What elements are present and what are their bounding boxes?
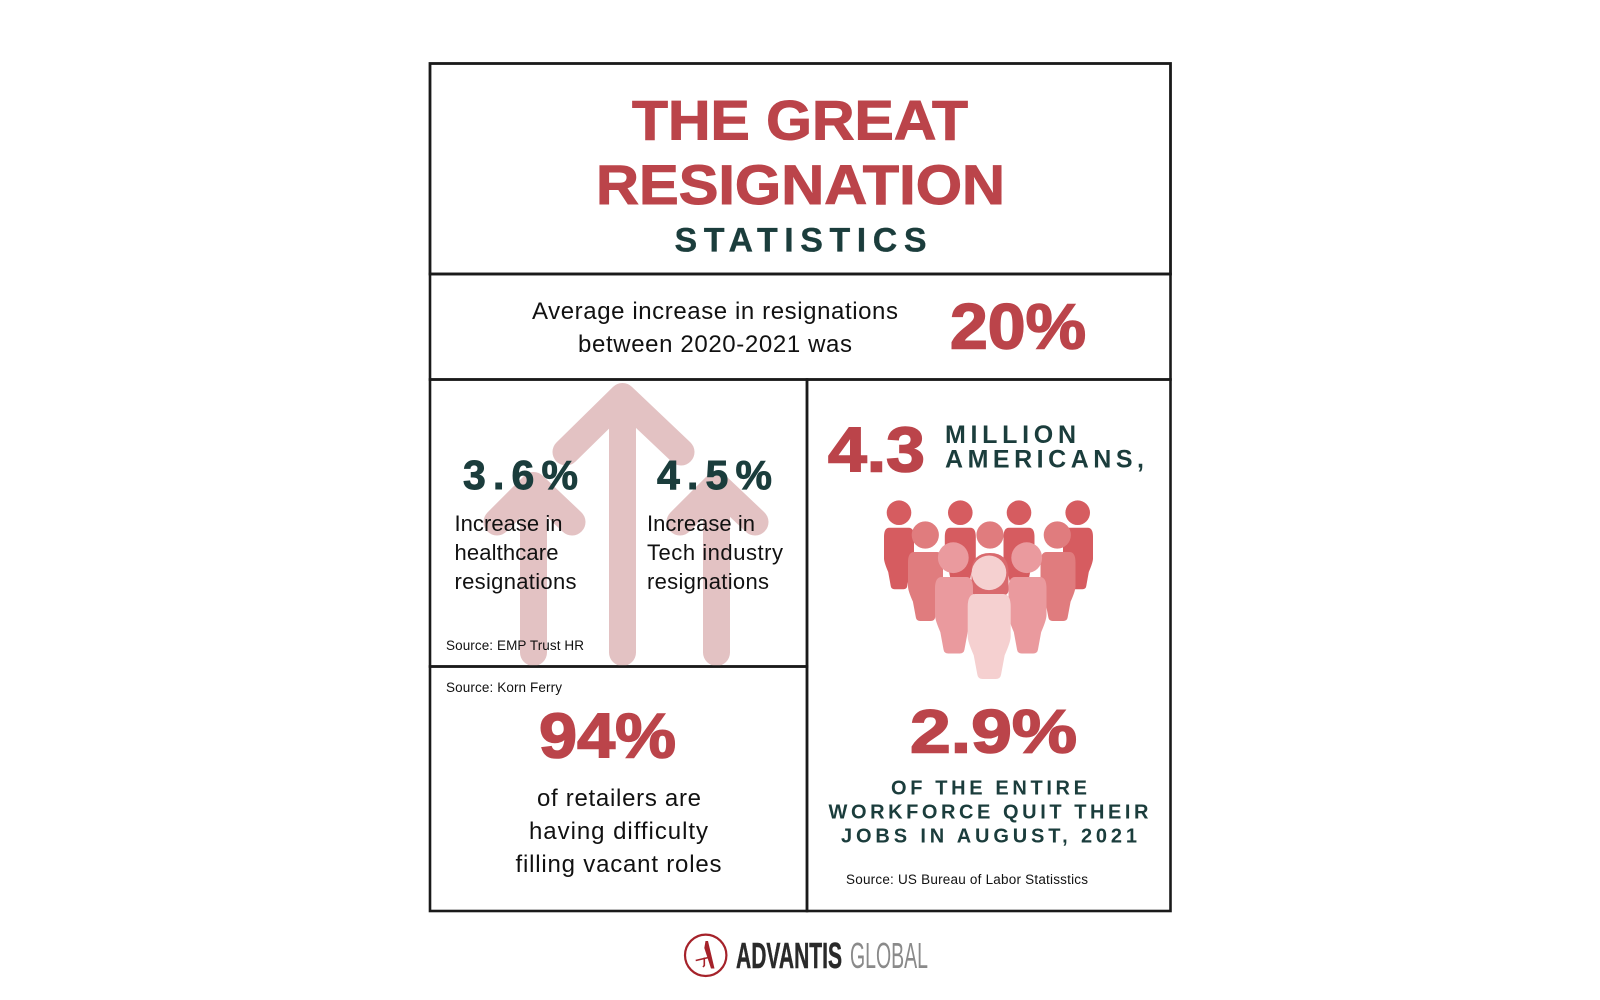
- icon: logo circle: [685, 935, 726, 976]
- text: workforce description: JOBS IN AUGUST, 2021: [841, 826, 1137, 848]
- source: US Bureau of Labor Statistics: Source: US Bureau of Labor Statisstics: [846, 872, 1088, 887]
- text: healthcare resignations: Increase in: [454, 511, 562, 536]
- stat: 20 percent: 20%: [950, 290, 1086, 362]
- source: Korn Ferry: Source: Korn Ferry: [446, 680, 562, 695]
- stat: 3.6 percent: 3.6%: [463, 452, 578, 498]
- source: EMP Trust HR: Source: EMP Trust HR: [446, 638, 584, 653]
- text: healthcare resignations: healthcare: [454, 540, 558, 565]
- text: retailers description: having difficulty: [529, 818, 708, 845]
- text: average increase description: Average increase in resignations: [532, 298, 898, 325]
- text: tech resignations: resignations: [647, 569, 769, 594]
- heading: the great: THE GREAT: [632, 88, 968, 152]
- text: million americans: AMERICANS,: [945, 446, 1144, 474]
- text: retailers description: of retailers are: [537, 785, 701, 812]
- panel: title: [430, 64, 1170, 274]
- text: tech resignations: Tech industry: [647, 540, 783, 565]
- panel: workforce: [807, 380, 1170, 911]
- arrow: large centre: [566, 396, 681, 652]
- arrow: left small: [497, 486, 572, 652]
- text: workforce description: OF THE ENTIRE: [891, 778, 1087, 800]
- text: healthcare resignations: resignations: [454, 569, 576, 594]
- logo: Advantis Global: [685, 935, 928, 976]
- arrow: right small: [680, 486, 755, 652]
- stat: 2.9 percent: 2.9%: [910, 698, 1077, 766]
- stat: 4.3: 4.3: [828, 416, 925, 486]
- icon: group of people: [884, 500, 1093, 679]
- stat: 94 percent: 94%: [539, 702, 676, 772]
- text: retailers description: filling vacant roles: [516, 851, 722, 878]
- text: average increase description: between 2020-2021 was: [578, 331, 852, 358]
- text: global: GLOBAL: [850, 935, 928, 976]
- stat: 4.5 percent: 4.5%: [657, 452, 772, 498]
- text: advantis: ADVANTIS: [736, 935, 842, 976]
- text: workforce description: WORKFORCE QUIT THEIR: [828, 802, 1149, 824]
- panel: retailers: [430, 666, 807, 911]
- text: tech resignations: Increase in: [647, 511, 755, 536]
- heading: resignation: RESIGNATION: [596, 153, 1005, 216]
- text: million americans: MILLION: [945, 421, 1076, 449]
- subheading: statistics: STATISTICS: [674, 222, 926, 260]
- panel: healthcare and tech: [430, 380, 807, 666]
- panel: average increase: [430, 274, 1170, 380]
